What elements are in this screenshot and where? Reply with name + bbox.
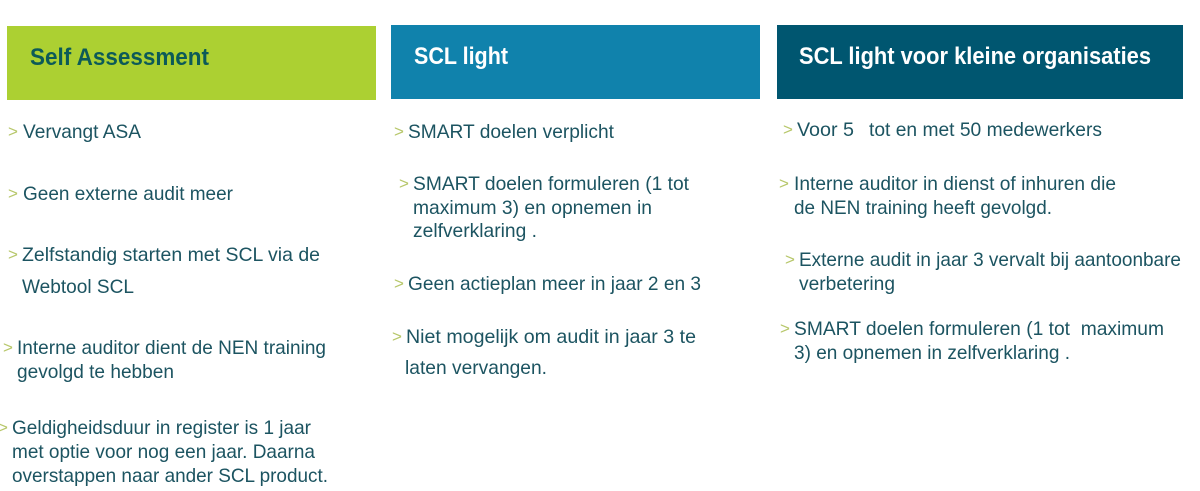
bullet: Interne auditor in dienst: de NEN training heeft gevolgd. xyxy=(794,197,1052,219)
bullet: SMART doelen formuleren: > xyxy=(399,174,409,193)
bullet: Externe audit xyxy=(785,249,1181,295)
bullet: Geldigheidsduur: met optie voor nog een jaar. Daarna xyxy=(12,441,315,463)
bullet: Geen externe audit: Geen externe audit meer xyxy=(23,183,233,205)
bullet: SMART doelen formuleren: SMART doelen formuleren (1 tot xyxy=(413,173,690,195)
header: SCL light: SCL light xyxy=(414,43,508,70)
panel: SCL light xyxy=(391,25,760,379)
bullet: Externe audit: Externe audit in jaar 3 vervalt bij aantoonbare xyxy=(799,249,1181,271)
bullet: Zelfstandig starten: Webtool SCL xyxy=(22,276,134,298)
bullet: SMART doelen formuleren: zelfverklaring . xyxy=(413,220,537,242)
header: Self Assessment: Self Assessment xyxy=(30,44,209,71)
bullet: Interne auditor: gevolgd te hebben xyxy=(17,361,174,383)
bullet: Voor 5 tot en met 50: Voor 5 xyxy=(797,119,854,141)
bullet: SMART doelen xyxy=(780,318,1164,364)
bullet: Niet mogelijk: > xyxy=(392,327,402,346)
bullet: Niet mogelijk xyxy=(392,326,696,379)
bullet: Niet mogelijk: Niet mogelijk om audit in jaar 3 te xyxy=(406,326,696,348)
bullet: Geldigheidsduur: overstappen naar ander SCL product. xyxy=(12,465,328,487)
bullet: Geen actieplan: Geen actieplan meer in jaar 2 en 3 xyxy=(408,273,701,295)
bullet: Externe audit: > xyxy=(785,250,795,269)
bullet: Voor 5 tot en met 50: > xyxy=(783,120,793,139)
bullet: Interne auditor: Interne auditor dient de NEN training xyxy=(17,337,326,359)
bullet: Interne auditor in dienst: > xyxy=(779,174,789,193)
bullet: SMART doelen verplicht: SMART doelen verplicht xyxy=(408,121,615,143)
bullet: Interne auditor in dienst xyxy=(779,173,1116,219)
header: SCL light voor kleine organisaties xyxy=(777,25,1183,99)
bullet: SMART doelen formuleren xyxy=(399,173,690,242)
header: Self Assessment xyxy=(7,26,376,100)
bullet: SMART doelen verplicht: > xyxy=(394,122,404,141)
bullet: Externe audit: verbetering xyxy=(799,273,895,295)
bullet: Zelfstandig starten xyxy=(8,244,320,298)
panel: SCL light voor kleine organisaties xyxy=(777,25,1183,364)
bullet: Vervangt ASA: Vervangt ASA xyxy=(23,121,141,143)
bullet: Geldigheidsduur xyxy=(0,417,328,487)
bullet: Zelfstandig starten: > xyxy=(8,245,18,264)
bullet: SMART doelen: 3) en opnemen in zelfverklaring . xyxy=(794,342,1070,364)
bullet: Geen actieplan: > xyxy=(394,274,404,293)
header: SCL light xyxy=(391,25,760,99)
bullet: SMART doelen formuleren: maximum 3) en opnemen in xyxy=(413,197,652,219)
panel: Self Assessment xyxy=(0,26,376,487)
header: SCL light voor kleine organisaties: SCL light voor kleine organisaties xyxy=(799,43,1151,70)
bullet: Interne auditor: > xyxy=(3,338,13,357)
bullet: Interne auditor in dienst: Interne auditor in dienst of inhuren die xyxy=(794,173,1116,195)
bullet: Vervangt ASA: > xyxy=(8,122,18,141)
bullet: Geldigheidsduur: Geldigheidsduur in register is 1 jaar xyxy=(12,417,311,439)
bullet: Zelfstandig starten: Zelfstandig starten met SCL via de xyxy=(22,244,320,266)
bullet: SMART doelen: > xyxy=(780,319,790,338)
bullet: Geen externe audit: > xyxy=(8,184,18,203)
bullet: Voor 5 tot en met 50: tot en met 50 medewerkers xyxy=(869,119,1102,141)
bullet: Niet mogelijk: laten vervangen. xyxy=(405,357,547,379)
bullet: Interne auditor xyxy=(3,337,326,383)
bullet: SMART doelen: SMART doelen formuleren (1 tot maximum xyxy=(794,318,1164,340)
